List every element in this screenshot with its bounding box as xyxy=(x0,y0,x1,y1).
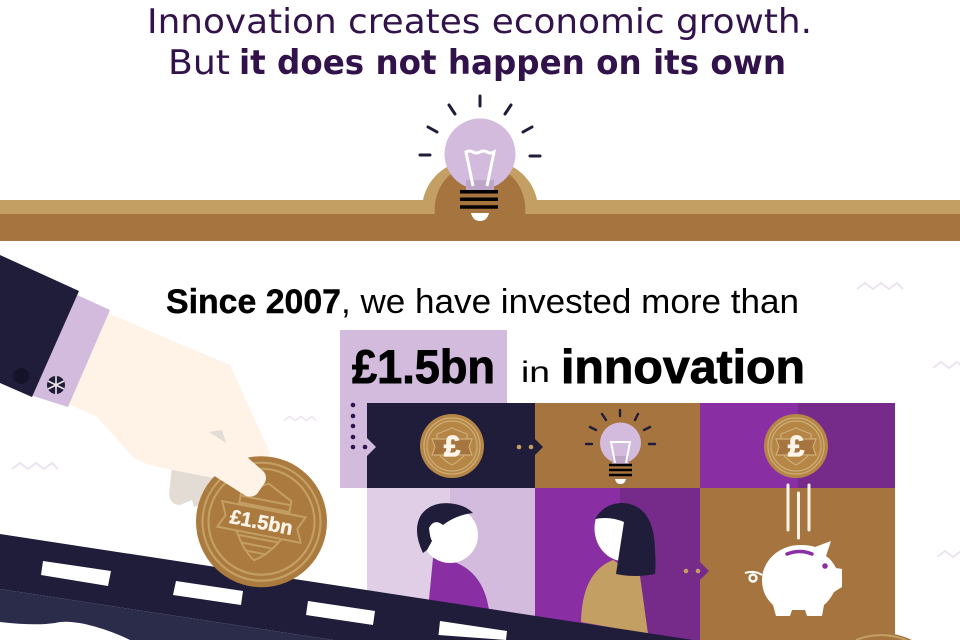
icon: light bulb xyxy=(420,96,540,221)
heading: amount: innovation xyxy=(561,340,805,393)
title: Innovation creates economic growth. xyxy=(147,2,812,42)
thumb xyxy=(205,445,266,497)
icon: connector arrow xyxy=(684,569,688,573)
heading: since 2007: , we have invested more than xyxy=(341,283,799,321)
shirt cuff xyxy=(30,294,110,407)
heading: amount xyxy=(352,340,805,393)
icon: coin peeking at bottom xyxy=(850,633,912,640)
knuckle shadow xyxy=(209,430,226,443)
heading: amount: £1.5bn xyxy=(352,340,495,393)
panel: lilac highlight xyxy=(340,330,507,488)
icon: piggy bank xyxy=(745,541,842,616)
heading: since 2007: Since 2007 xyxy=(166,283,341,321)
ground band with arch xyxy=(0,163,960,241)
sleeve button xyxy=(13,368,29,384)
panel: person one xyxy=(367,488,535,640)
panel: purple coin cell xyxy=(700,403,895,488)
icon: union flag cufflink xyxy=(47,376,65,394)
road xyxy=(0,534,693,640)
icon: small bulb xyxy=(586,410,655,484)
panel: brown bulb cell xyxy=(517,403,700,488)
panel: person two xyxy=(535,488,700,640)
hand xyxy=(64,312,270,500)
panel: piggy bank cell xyxy=(696,485,912,640)
rear fingers xyxy=(169,466,225,507)
icon: dotted path xyxy=(351,403,367,449)
illustration: hand with coin xyxy=(0,255,327,587)
title: But xyxy=(168,43,230,83)
panel: navy coin cell xyxy=(351,403,535,488)
decorative squiggles xyxy=(12,283,960,557)
coin label: £1.5bn xyxy=(228,506,294,540)
title xyxy=(147,2,812,83)
title: it does not happen on its own xyxy=(239,43,786,83)
icon: large coin xyxy=(196,456,327,587)
icon: pound coin xyxy=(764,414,828,478)
icon: falling lines xyxy=(788,485,809,538)
sleeve xyxy=(0,255,79,397)
icon: pound coin xyxy=(420,414,484,478)
heading: amount: in xyxy=(521,356,550,389)
